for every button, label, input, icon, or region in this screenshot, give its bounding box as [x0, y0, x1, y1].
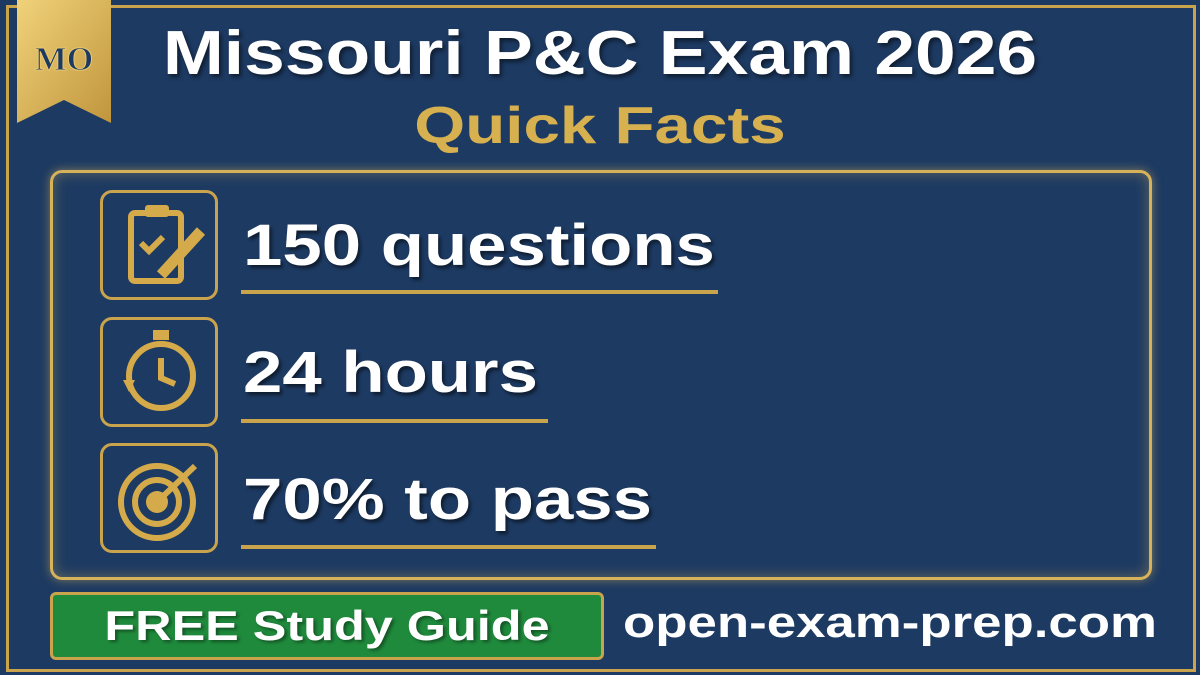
icon: stopwatch	[100, 317, 218, 427]
url: open-exam-prep.com	[623, 598, 1157, 647]
panel: facts	[50, 170, 1152, 580]
subtitle: Quick Facts	[414, 97, 786, 155]
fact 3: 70% to pass	[243, 467, 652, 532]
icon: clipboard	[100, 190, 218, 300]
title: Missouri P&C Exam 2026	[163, 19, 1037, 88]
fact 1: 150 questions	[243, 213, 715, 278]
ribbon badge: MO	[17, 0, 111, 123]
icon: target	[100, 443, 218, 553]
button: free study guide	[50, 592, 604, 660]
ribbon badge: MO: MO	[35, 41, 93, 78]
fact 2: 24 hours	[243, 340, 538, 405]
button: free study guide: FREE Study Guide	[104, 602, 550, 649]
